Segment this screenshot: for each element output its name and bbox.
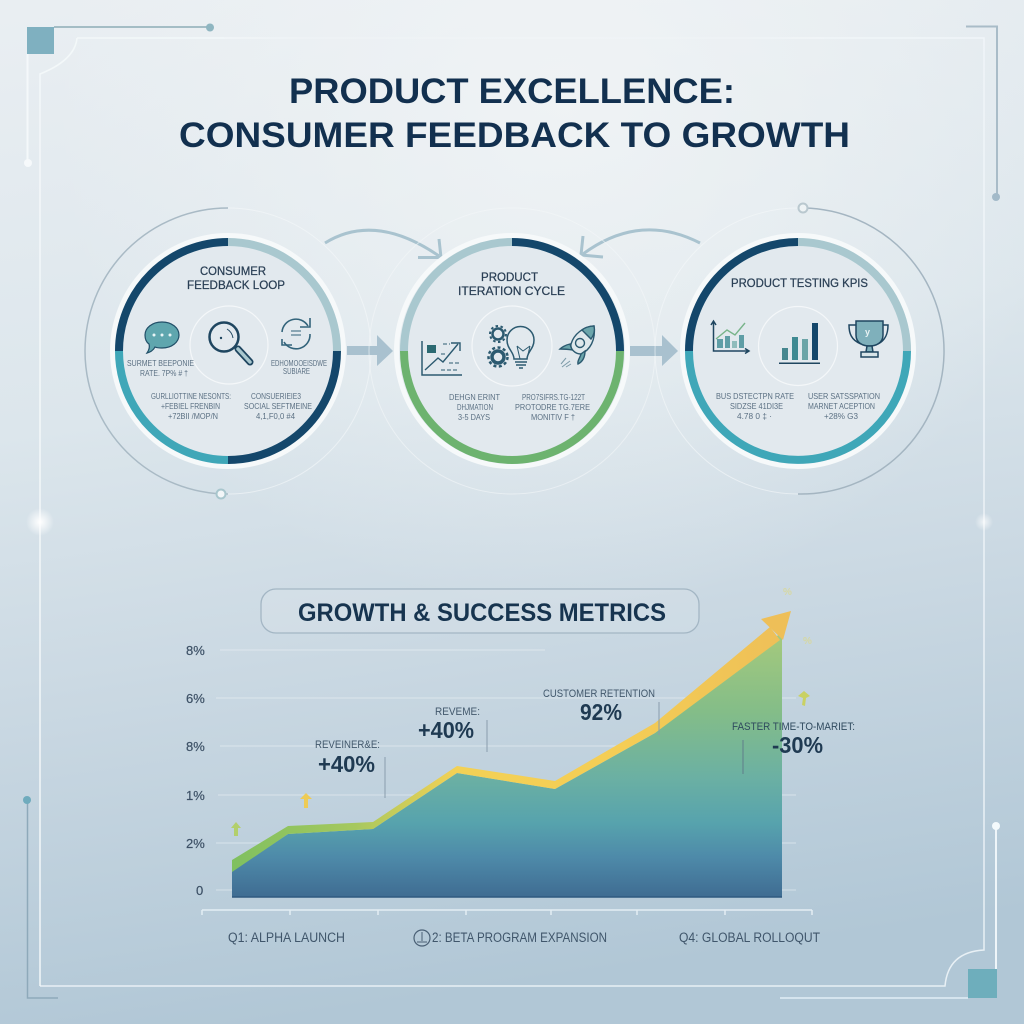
- decorative frame: bottom-left corner: [23, 796, 58, 998]
- panel: product testing KPIs: [655, 204, 944, 494]
- x axis: [202, 910, 812, 915]
- metric text: SOCIAL SEFTMEINE: [244, 401, 312, 411]
- metric text: 3-5 DAYS: [458, 412, 490, 422]
- outer orbit ring: [369, 208, 655, 494]
- icon: speech bubble: [145, 322, 179, 353]
- metric text: +FEBIEL FRENBIN: [161, 401, 220, 411]
- trend line with arrow: [232, 611, 791, 872]
- metric text: MARNET ACEPTION: [808, 401, 875, 411]
- metric text: PROTODRE TG.7ERE: [515, 402, 590, 412]
- title: [179, 72, 850, 155]
- section heading: growth and success metrics: [261, 589, 699, 633]
- metric text: DHJMATION: [457, 402, 493, 412]
- heading: CONSUMER: [200, 264, 266, 278]
- metric text: SUBIARE: [283, 366, 310, 376]
- y axis labels: 2%: [186, 836, 205, 851]
- callout: faster time to market: FASTER TIME-TO-MARIET:: [732, 721, 855, 733]
- title: CONSUMER FEEDBACK TO GROWTH: [179, 116, 850, 155]
- icon: trophy: y: [865, 327, 870, 337]
- metric text: [716, 391, 880, 421]
- panel: consumer feedback loop: [85, 208, 371, 498]
- icon: sync arrows: [282, 318, 310, 349]
- section heading: growth and success metrics: GROWTH & SUCCESS METRICS: [298, 599, 666, 627]
- metric text: [127, 358, 327, 421]
- small up arrows: [231, 587, 812, 836]
- panel: product iteration cycle: [369, 208, 655, 494]
- metric text: SURMET BEEPONIE: [127, 358, 194, 368]
- metric text: RATE. 7P% # †: [140, 368, 188, 378]
- y axis labels: 1%: [186, 788, 205, 803]
- y axis labels: [186, 643, 205, 898]
- callout: revenue second: [418, 706, 487, 752]
- heading: ITERATION CYCLE: [458, 284, 565, 298]
- metric text: DEHGN ERINT: [449, 392, 500, 402]
- callout: customer retention: CUSTOMER RETENTION: [543, 688, 655, 700]
- title: PRODUCT EXCELLENCE:: [289, 72, 735, 111]
- metric text: USER SATSSPATION: [808, 391, 880, 401]
- arrow: feedback loop to iteration cycle: [347, 335, 393, 366]
- callout: revenue second: REVEME:: [435, 706, 480, 718]
- area chart: growth and success: [186, 611, 820, 946]
- outer orbit ring: [655, 204, 944, 494]
- metric text: SIDZSE 41DI3E: [730, 401, 783, 411]
- ring: [396, 236, 628, 466]
- metric text: PRO7SIFRS.TG-122T: [522, 392, 585, 402]
- small up arrows: %: [803, 636, 812, 647]
- x axis labels: [228, 930, 820, 946]
- x axis labels: Q4: GLOBAL ROLLOQUT: [679, 930, 820, 945]
- icon: growth chart: [711, 321, 749, 354]
- callout: revenue first: REVEINER&E:: [315, 739, 380, 751]
- icon: gears and light bulb: [488, 326, 534, 368]
- metric text: 4.78 0 ‡ ·: [737, 411, 772, 421]
- heading: FEEDBACK LOOP: [187, 278, 285, 292]
- heading: [187, 264, 285, 292]
- callout: faster time to market: -30%: [772, 732, 823, 758]
- callout: customer retention: 92%: [580, 699, 622, 725]
- icon: rocket: [560, 326, 594, 367]
- icon: bar chart: [779, 323, 820, 364]
- heading: PRODUCT: [481, 270, 539, 284]
- metric text: EDHOMOOEISDWE: [271, 358, 327, 368]
- icon: magnifying glass: [210, 322, 250, 362]
- area fill: [232, 632, 782, 897]
- decorative frame: top-right corner: [966, 26, 1000, 201]
- metric text: [449, 392, 590, 422]
- decorative frame: bottom-right corner: [780, 822, 1000, 998]
- y axis labels: 8%: [186, 643, 205, 658]
- ring: [682, 236, 914, 466]
- decorative frame: top-left corner: [24, 24, 214, 167]
- callout: faster time to market: [732, 721, 855, 774]
- x axis labels: 2: BETA PROGRAM EXPANSION: [432, 930, 607, 945]
- metric text: MONITIV F †: [531, 412, 575, 422]
- callout: revenue first: +40%: [318, 751, 375, 777]
- x axis labels: Q1: ALPHA LAUNCH: [228, 930, 345, 945]
- callout: revenue first: [315, 739, 385, 798]
- heading: [458, 270, 565, 298]
- arrow: iteration cycle to testing KPIs: [630, 335, 678, 366]
- metric text: GURLLIOTTINE NESONTS:: [151, 391, 231, 401]
- metric text: CONSUERIEIE3: [251, 391, 301, 401]
- heading: PRODUCT TESTING KPIS: [731, 276, 868, 290]
- metric text: +72BII /MOP/N: [168, 411, 218, 421]
- y axis labels: 6%: [186, 691, 205, 706]
- curved arrow: testing KPIs to iteration cycle: [581, 230, 700, 257]
- callout: customer retention: [543, 688, 659, 735]
- y axis labels: 0: [196, 883, 203, 898]
- callout: revenue second: +40%: [418, 717, 474, 743]
- metric text: 4,1,F0,0 #4: [256, 411, 295, 421]
- curved arrow: feedback loop to iteration cycle: [325, 230, 441, 258]
- small up arrows: %: [783, 587, 792, 598]
- outer orbit ring: [85, 208, 371, 498]
- metric text: BUS DSTECTPN RATE: [716, 391, 794, 401]
- ring: [112, 236, 344, 466]
- metric text: +28% G3: [824, 411, 858, 421]
- y axis labels: 8%: [186, 739, 205, 754]
- icon: design chart: [422, 341, 462, 375]
- icon: trophy: [849, 321, 888, 357]
